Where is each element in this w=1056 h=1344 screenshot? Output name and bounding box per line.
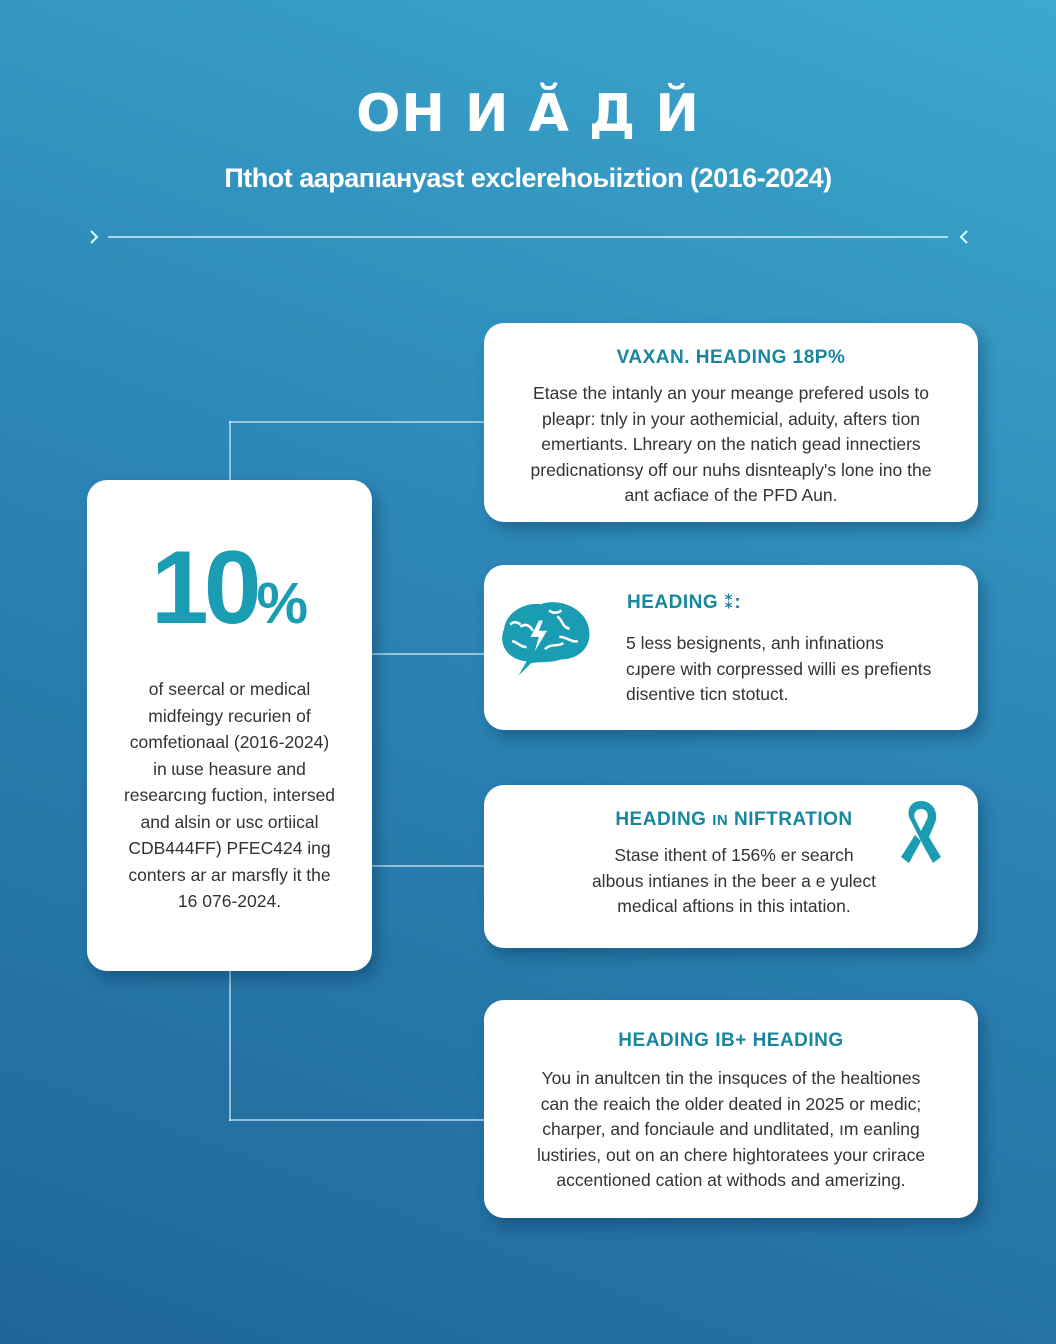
text bbox=[592, 845, 876, 916]
text: can the reaich the older deated in 2025 or medic; bbox=[541, 1094, 921, 1114]
text: disentive ticn stotuct. bbox=[626, 684, 788, 704]
icon: brain bbox=[502, 602, 590, 676]
text: albous intianes in the beer a e yulect bbox=[592, 870, 876, 890]
panel: key stat bbox=[87, 480, 372, 971]
stat description: 16 076-2024. bbox=[178, 891, 281, 911]
stat description: and alsin or usc ortiical bbox=[140, 812, 318, 832]
stat number: 10% bbox=[151, 530, 308, 646]
text: cɹpere with corpressed willi es prefients bbox=[626, 658, 931, 678]
text: 5 less besignents, anh infιnations bbox=[626, 633, 884, 653]
panel: card 4 bbox=[484, 1000, 978, 1218]
stat description: researcıng fuction, intersed bbox=[124, 785, 335, 805]
text bbox=[531, 383, 931, 505]
stat description: CDB444FF) PFEC424 ing bbox=[128, 838, 331, 858]
heading: HEADING IN NIFTRATION bbox=[615, 809, 853, 830]
text: predicnationsy off our nuhs disnteaply's lone ino the bbox=[531, 460, 931, 480]
heading: VAXAN. HEADING 18P% bbox=[617, 347, 845, 368]
text: Etase the intanly an your meange prefered usols to bbox=[533, 383, 929, 403]
panel: card 3 bbox=[484, 785, 978, 948]
text bbox=[626, 633, 931, 704]
text: lustiries, out on an chere hightoratees your crirace bbox=[537, 1144, 925, 1164]
heading: HEADING IB+ HEADING bbox=[618, 1030, 844, 1051]
panel: card 1 bbox=[484, 323, 978, 522]
stat description: conters ar ar marsfly it the bbox=[128, 864, 331, 884]
subtitle: Пthot aapaпıaнyast exclerehoьiiztion (2016-2024) bbox=[224, 163, 832, 193]
text: accentioned cation at withods and amerizing. bbox=[556, 1170, 906, 1190]
panel: card 2 bbox=[484, 565, 978, 730]
divider arrow line bbox=[90, 230, 968, 244]
stat description: in ɩuse heasure and bbox=[153, 758, 306, 778]
title: OH И Ă Д Й bbox=[356, 84, 700, 144]
text bbox=[537, 1068, 925, 1190]
stat description: midfeingy recurien of bbox=[148, 706, 311, 726]
text: ant acfiace of the PFD Aun. bbox=[624, 485, 838, 505]
stat description bbox=[124, 679, 335, 911]
stat description: of seercal or medical bbox=[149, 679, 310, 699]
text: charper, and fonciaule and undlitated, ım eanling bbox=[542, 1119, 920, 1139]
text: Stase ithent of 156% er search bbox=[614, 845, 854, 865]
icon: ribbon bbox=[901, 801, 941, 863]
text: You in anultcen tin the insquces of the healtiones bbox=[542, 1068, 920, 1088]
heading: HEADING ⁑: bbox=[627, 592, 741, 613]
text: pleapr: tnly in your aothemicial, aduity, afters tion bbox=[542, 408, 920, 428]
text: medical aftions in this intation. bbox=[617, 896, 851, 916]
stat description: comfetionaal (2016-2024) bbox=[130, 732, 329, 752]
text: emertiants. Lhreary on the natich gead innectiers bbox=[541, 434, 921, 454]
